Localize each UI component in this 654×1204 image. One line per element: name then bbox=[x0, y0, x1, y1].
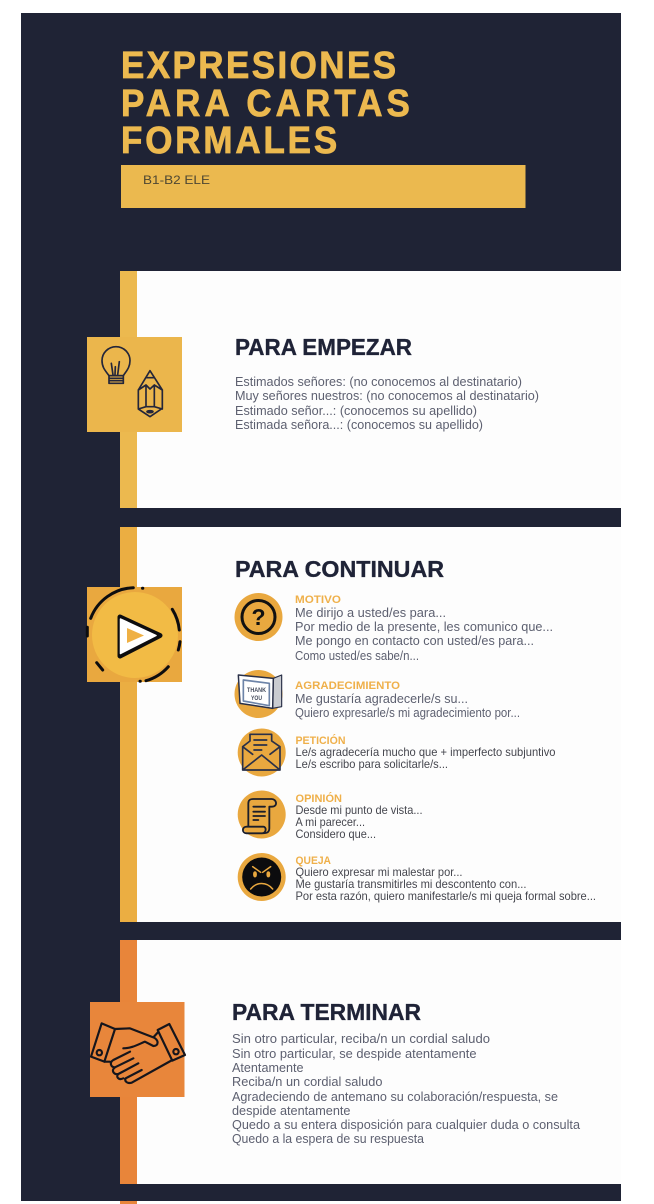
text block: despedidas: Sin otro particular, reciba/n un cordial saludo bbox=[232, 1032, 490, 1046]
icon: thank you card: YOU bbox=[251, 695, 262, 702]
text block: saludos bbox=[235, 375, 539, 432]
block: peticion: Le/s escribo para solicitarle/s... bbox=[296, 757, 448, 771]
block: queja: Por esta razón, quiero manifestarle/s mi queja formal sobre... bbox=[296, 889, 596, 903]
block: motivo: MOTIVO bbox=[295, 594, 341, 606]
icon: light bulb and pencil bbox=[102, 347, 162, 417]
block: agradecimiento bbox=[295, 680, 520, 720]
text block: despedidas: Atentamente bbox=[232, 1061, 304, 1075]
heading: para terminar: PARA TERMINAR bbox=[232, 999, 421, 1025]
icon: scroll bbox=[238, 790, 286, 838]
block: motivo: Me pongo en contacto con usted/es para... bbox=[295, 634, 534, 648]
block: agradecimiento: Quiero expresarle/s mi agradecimiento por... bbox=[295, 706, 520, 720]
text block: despedidas: Quedo a la espera de su respuesta bbox=[232, 1132, 424, 1146]
block: agradecimiento: AGRADECIMIENTO bbox=[295, 680, 400, 692]
block: queja: Quiero expresar mi malestar por... bbox=[296, 865, 462, 879]
text block: despedidas: despide atentamente bbox=[232, 1104, 351, 1118]
text block: saludos: Estimada señora...: (conocemos su apellido) bbox=[235, 418, 483, 432]
block: agradecimiento: Me gustaría agradecerle/s su... bbox=[295, 692, 468, 706]
block: opinion: Considero que... bbox=[296, 827, 376, 841]
block: queja: Me gustaría transmitirles mi descontento con... bbox=[296, 877, 526, 891]
icon: envelope bbox=[238, 728, 286, 776]
text block: saludos: Estimados señores: (no conocemos al destinatario) bbox=[235, 375, 522, 389]
block: motivo: Por medio de la presente, les comunico que... bbox=[295, 620, 553, 634]
icon: angry face bbox=[238, 853, 286, 901]
title bbox=[121, 44, 410, 161]
panel: para empezar bbox=[87, 271, 621, 508]
subtitle banner: B1-B2 ELE bbox=[143, 173, 210, 187]
text block: despedidas bbox=[232, 1032, 580, 1146]
text block: saludos: Muy señores nuestros: (no conocemos al destinatario) bbox=[235, 389, 539, 403]
block: motivo: Me dirijo a usted/es para... bbox=[295, 606, 446, 620]
title: EXPRESIONES bbox=[121, 44, 396, 86]
block: opinion: A mi parecer... bbox=[296, 815, 365, 829]
text block: despedidas: Quedo a su entera disposición para cualquier duda o consulta bbox=[232, 1118, 580, 1132]
block: motivo bbox=[295, 594, 553, 663]
block: queja: QUEJA bbox=[296, 855, 331, 867]
block: opinion: OPINIÓN bbox=[296, 792, 342, 805]
block: opinion: Desde mi punto de vista... bbox=[296, 803, 422, 817]
text block: despedidas: Sin otro particular, se despide atentamente bbox=[232, 1047, 477, 1061]
text block: despedidas: Agradeciendo de antemano su colaboración/respuesta, se bbox=[232, 1090, 558, 1104]
heading: para empezar: PARA EMPEZAR bbox=[235, 334, 412, 360]
block: peticion: PETICIÓN bbox=[296, 734, 346, 747]
icon: question mark: ? bbox=[251, 604, 266, 630]
block: opinion bbox=[296, 792, 422, 841]
text block: despedidas: Reciba/n un cordial saludo bbox=[232, 1075, 383, 1089]
title: PARA CARTAS bbox=[121, 82, 410, 124]
icon: thank you card bbox=[234, 670, 282, 718]
block: peticion: Le/s agradecería mucho que + imperfecto subjuntivo bbox=[296, 745, 556, 759]
block: queja bbox=[296, 855, 596, 903]
block: peticion bbox=[296, 734, 556, 771]
icon: handshake bbox=[91, 1023, 185, 1083]
text block: saludos: Estimado señor...: (conocemos su apellido) bbox=[235, 404, 477, 418]
icon: play button bbox=[87, 587, 182, 682]
icon: thank you card: THANK bbox=[247, 687, 266, 694]
icon: question mark bbox=[234, 593, 282, 641]
panel: para terminar bbox=[90, 940, 621, 1204]
block: motivo: Como usted/es sabe/n... bbox=[295, 649, 419, 663]
heading: para continuar: PARA CONTINUAR bbox=[235, 556, 444, 582]
title: FORMALES bbox=[121, 119, 337, 161]
panel: para continuar bbox=[87, 527, 621, 922]
subtitle banner bbox=[121, 165, 526, 208]
